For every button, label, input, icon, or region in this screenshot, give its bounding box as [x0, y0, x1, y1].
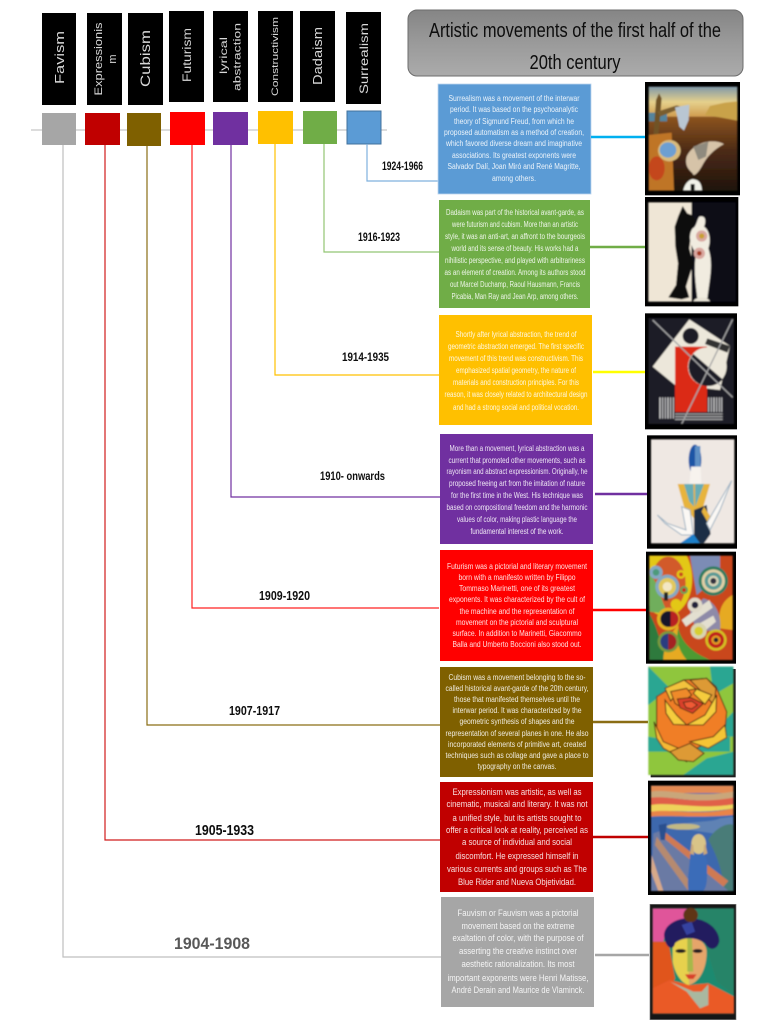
panel: dadaism: were futurism and cubism. More than an artistic	[451, 220, 578, 229]
panel: lyrical abstraction: based on compositional freedom and the harmonic	[446, 503, 588, 512]
panel: futurism: surface. In addition to Marinetti, Giacommo	[452, 629, 582, 638]
painting: cubism rose	[648, 667, 736, 777]
panel: fauvism: Fauvism or Fauvism was a pictorial	[458, 908, 578, 918]
panel: futurism: Futurism was a pictorial and literary movement	[447, 562, 588, 571]
panel: dadaism: nihilistic perspective, and played with arbitrariness	[445, 256, 585, 265]
panel: expressionism: a source of individual and social	[462, 837, 572, 847]
panel: expressionism: Expressionism was artistic, as well as	[452, 787, 582, 797]
panel: expressionism: cinematic, musical and literary. It was not	[446, 799, 588, 809]
colour squares	[42, 111, 381, 146]
date labels: 1914-1935	[342, 350, 389, 364]
panel: fauvism: movement based on the extreme	[462, 921, 574, 931]
painting: futurism concentric circles	[646, 552, 736, 664]
movement name labels: Surrealism	[357, 23, 371, 94]
panel: fauvism: aesthetic rationalization. Its most	[462, 959, 575, 969]
title	[408, 10, 743, 76]
panel: fauvism: André Derain and Maurice de Vlaminck.	[452, 985, 584, 995]
panel: lyrical abstraction: fundamental interest of the work.	[470, 527, 564, 536]
panel: lyrical abstraction: rayonism and abstract expressionism. Originally, he	[446, 467, 588, 476]
movement name labels	[42, 11, 381, 105]
painting: fauvism portrait	[650, 904, 736, 1020]
movement name labels: Constructivism	[270, 17, 281, 96]
date labels: 1904-1908	[174, 934, 250, 953]
movement name labels: m	[107, 54, 119, 64]
movement name labels: lyrical	[219, 37, 230, 74]
movement name labels: abstraction	[232, 23, 244, 91]
panel: lyrical abstraction: values of color, making plastic language the	[457, 515, 577, 524]
panel-to-painting connectors	[590, 137, 649, 955]
panel: surrealism: period. It was based on the psychoanalytic	[450, 105, 578, 114]
date labels	[174, 161, 423, 953]
panel: expressionism: offer a critical look at reality, perceived as	[446, 825, 588, 835]
timeline axis	[31, 129, 387, 131]
panel: dadaism: world and its sense of beauty. His works had a	[451, 244, 579, 253]
panel: dadaism: style, it was an anti-art, an affront to the bourgeois	[445, 232, 585, 241]
panel: futurism: movement on the pictorial and sculptural	[456, 618, 578, 627]
movement name labels: Dadaism	[310, 27, 325, 85]
panel: cubism: those that manifested themselves until the	[454, 695, 580, 704]
panel: expressionism: a unified style, but its artists sought to	[452, 813, 582, 823]
panel: cubism: incorporated elements of primitive art, created	[448, 740, 586, 749]
panel: constructivism: geometric abstraction emerged. The first specific	[448, 342, 584, 351]
date labels: 1924-1966	[382, 161, 423, 173]
panel: futurism: born with a manifesto written by Filippo	[458, 573, 576, 582]
panel: cubism: techniques such as collage and gave a place to	[446, 751, 589, 760]
panel: constructivism: reason, it was closely related to architectural design	[444, 390, 588, 399]
panel: constructivism: emphasized spatial geometry, the nature of	[456, 366, 577, 375]
panel: cubism: representation of several planes in one. He also	[446, 729, 589, 738]
panel: lyrical abstraction: More than a movement, lyrical abstraction was a	[450, 444, 585, 453]
panel: futurism: Tommaso Marinetti, one of its greatest	[459, 584, 576, 593]
painting: surrealism melting clocks	[645, 82, 740, 195]
panel: cubism: Cubism was a movement belonging to the so-	[448, 673, 586, 682]
panel: futurism: exponents. It was characterized by the cult of	[449, 595, 586, 604]
panel: constructivism: and had a strong social and political vocation.	[453, 403, 579, 412]
panel: cubism	[440, 667, 593, 777]
panel: lyrical abstraction	[440, 434, 593, 544]
panel: expressionism: discomfort. He expressed himself in	[456, 851, 578, 861]
movement name labels: Cubism	[137, 30, 153, 87]
panel: futurism: the machine and the representation of	[460, 607, 575, 616]
panel: cubism: geometric synthesis of shapes and the	[460, 717, 575, 726]
panel: lyrical abstraction: for the first time in the West. His technique was	[451, 491, 583, 500]
panel: surrealism: which favored diverse dream and imaginative	[445, 139, 582, 148]
panel: constructivism	[439, 315, 592, 425]
panel: surrealism: theory of Sigmund Freud, from which he	[454, 117, 574, 126]
date labels: 1910- onwards	[320, 469, 385, 483]
date labels: 1909-1920	[259, 588, 310, 603]
panel: constructivism: Shortly after lyrical abstraction, the trend of	[456, 330, 577, 339]
panel: cubism: called historical avant-garde of the 20th century,	[446, 684, 588, 693]
panel: surrealism: among others.	[492, 174, 536, 183]
panel: expressionism: various currents and groups such as The	[447, 864, 587, 874]
panel: expressionism: Blue Rider and Nueva Objetividad.	[458, 877, 576, 887]
movement name labels: Expressionis	[93, 22, 105, 96]
panel: surrealism: proposed automatism as a method of creation,	[444, 128, 584, 137]
panel: surrealism	[438, 84, 591, 194]
panel: dadaism: as an element of creation. Among its authors stood	[444, 268, 586, 277]
panel: fauvism: asserting the creative instinct over	[459, 946, 577, 956]
movement name labels: Futurism	[182, 28, 194, 82]
panel: lyrical abstraction: proposed freeing art from the imitation of nature	[449, 479, 585, 488]
panel: constructivism: movement of this trend was constructivism. This	[449, 354, 583, 363]
panel: surrealism: associations. Its greatest exponents were	[452, 151, 576, 160]
panel: dadaism: Dadaism was part of the historical avant-garde, as	[446, 208, 584, 217]
title: 20th century	[530, 52, 620, 74]
panel: futurism: Balla and Umberto Boccioni also stood out.	[452, 640, 582, 649]
date labels: 1907-1917	[229, 703, 280, 718]
panel: fauvism: important exponents were Henri Matisse,	[448, 973, 588, 983]
painting: expressionism scream	[648, 781, 736, 895]
panel: fauvism	[441, 897, 594, 1007]
panel: dadaism: Picabia, Man Ray and Jean Arp, among others.	[452, 292, 578, 301]
panel: surrealism: Surrealism was a movement of the interwar	[448, 94, 580, 103]
painting: dadaism silhouettes	[645, 197, 738, 306]
panel: futurism	[440, 550, 593, 661]
panel: cubism: interwar period. It was characterized by the	[452, 706, 582, 715]
date labels: 1916-1923	[358, 232, 400, 244]
panel: dadaism: out Marcel Duchamp, Raoul Hausmann, Francis	[450, 280, 580, 289]
painting: lyrical abstraction figure	[647, 435, 737, 549]
panel: dadaism	[439, 200, 590, 308]
panel: fauvism: exaltation of color, with the purpose of	[452, 933, 584, 943]
movement name labels: Favism	[52, 31, 67, 84]
timeline elbow connectors	[63, 144, 442, 957]
panel: expressionism	[440, 782, 593, 892]
panel: surrealism: Salvador Dalí, Joan Miró and René Magritte,	[448, 162, 580, 171]
panel: lyrical abstraction: current that promoted other movements, such as	[448, 456, 586, 465]
panel: cubism: typography on the canvas.	[478, 762, 556, 771]
painting: constructivism geometric composition	[645, 313, 737, 429]
date labels: 1905-1933	[195, 823, 254, 839]
panel: constructivism: materials and construction principles. For this	[453, 378, 579, 387]
